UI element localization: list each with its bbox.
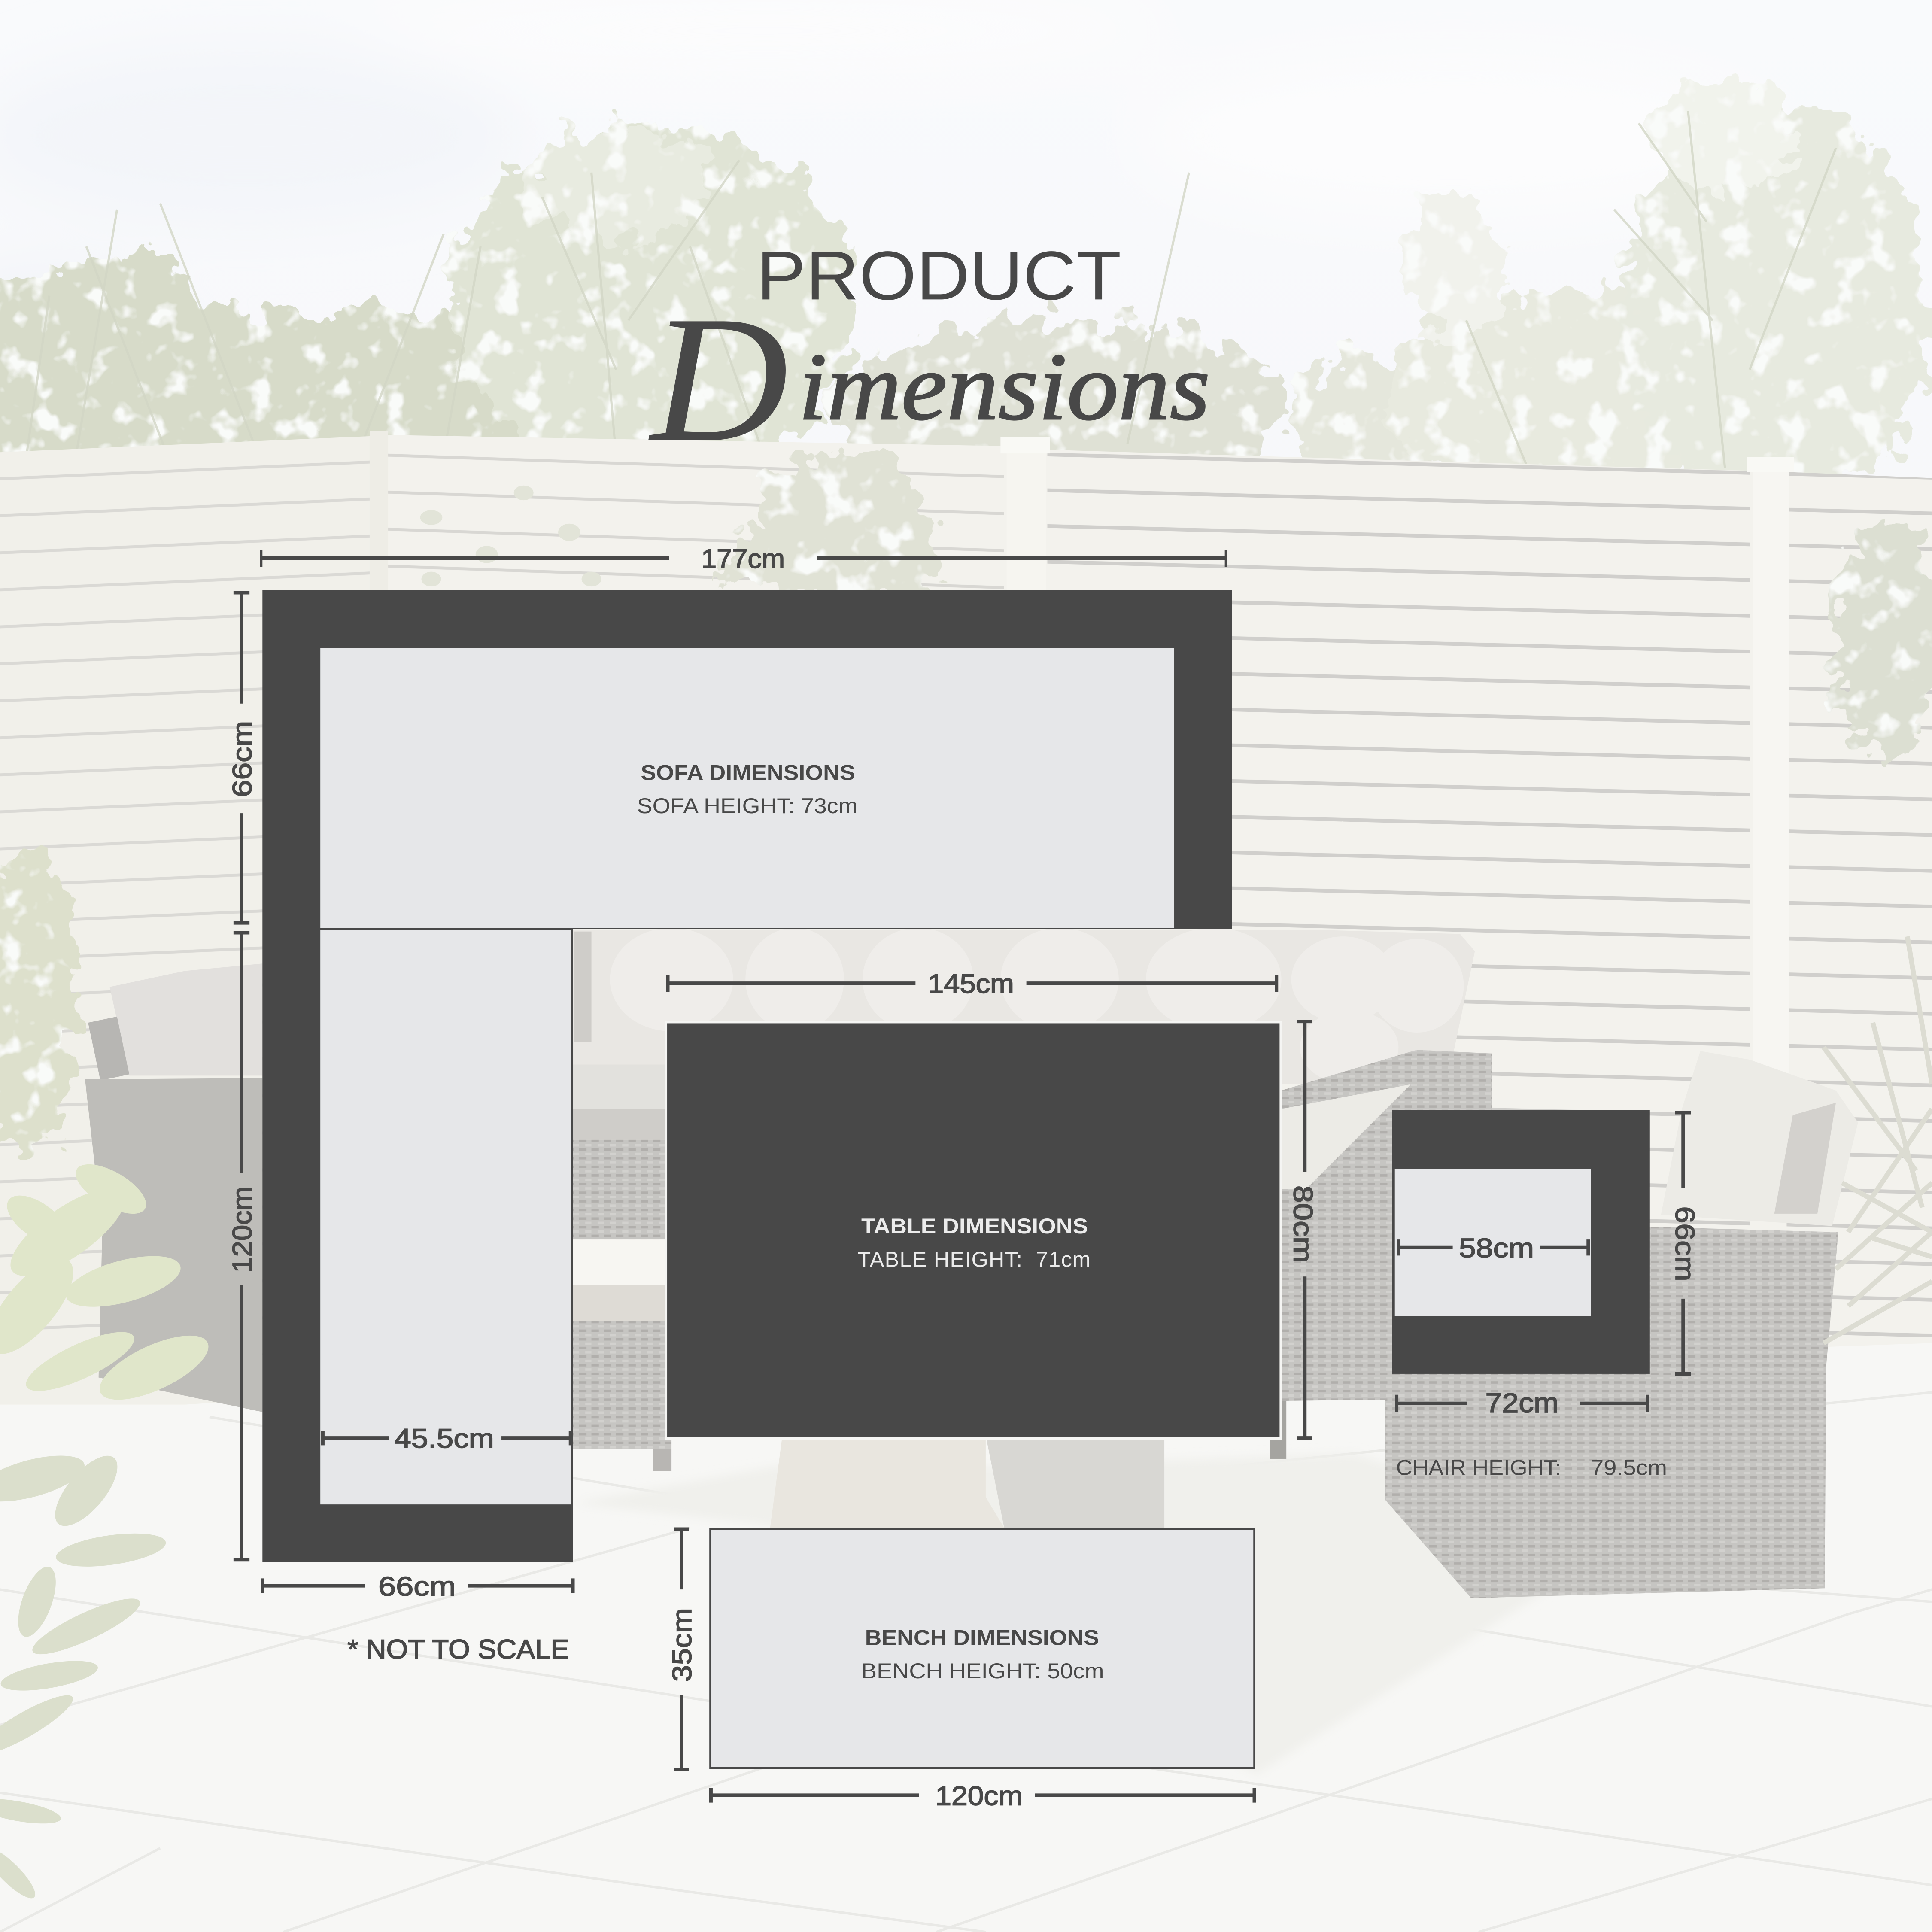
patio floor	[0, 1343, 1932, 1932]
right chair wicker	[1385, 1220, 1838, 1598]
dimension: 45.5cm seat	[323, 1424, 571, 1454]
chair height label	[1396, 1455, 1667, 1479]
chair height label: CHAIR HEIGHT:	[1396, 1455, 1561, 1479]
sofa outer footprint	[262, 590, 1232, 1562]
dimension: 58cm	[1398, 1233, 1588, 1264]
foreground plant left	[0, 850, 217, 1904]
dimension: sofa 120cm length	[227, 933, 257, 1560]
title: Dimensions script: imensions	[799, 334, 1210, 440]
dimension: sofa 66cm width: 66cm	[378, 1572, 456, 1602]
title: Dimensions script: D	[647, 279, 789, 480]
sky	[0, 0, 1932, 641]
title: Dimensions script	[647, 279, 1210, 480]
tree line foliage	[0, 80, 1928, 517]
bench label: BENCH DIMENSIONS	[865, 1625, 1099, 1649]
fence posts	[370, 431, 1794, 1106]
table diagram	[666, 969, 1318, 1439]
dimension: bench 120cm: 120cm	[935, 1781, 1023, 1811]
bench label: BENCH HEIGHT: 50cm	[861, 1659, 1104, 1683]
left chair	[85, 963, 262, 1412]
table top	[666, 1022, 1281, 1439]
floor shadows	[573, 1454, 1626, 1774]
dimension: 72cm: 72cm	[1485, 1388, 1558, 1418]
dimension: 35cm	[667, 1529, 697, 1769]
sofa long section seat	[320, 648, 1174, 928]
dimension: 45.5cm seat: 45.5cm	[394, 1424, 494, 1454]
table label: TABLE HEIGHT: 71cm	[857, 1247, 1091, 1271]
low table and bench behind	[573, 1065, 671, 1471]
sofa label: SOFA DIMENSIONS	[641, 761, 855, 785]
dimension: 177cm: 177cm	[701, 544, 785, 574]
bench label	[861, 1625, 1104, 1683]
patio tile lines	[0, 1392, 1932, 1932]
dimension: 35cm: 35cm	[667, 1608, 697, 1682]
table label	[857, 1214, 1091, 1271]
climbing plants in front of fence	[420, 444, 1932, 758]
fence: left panel	[0, 436, 370, 1417]
chair diagram	[1392, 1110, 1700, 1479]
table label: TABLE DIMENSIONS	[861, 1214, 1088, 1238]
dimension: 80cm	[1288, 1021, 1318, 1438]
left chair cushion	[109, 963, 262, 1075]
bench seat	[710, 1529, 1255, 1768]
bench diagram	[667, 1529, 1255, 1811]
left chair wicker	[85, 1078, 262, 1412]
dimension: bench 120cm	[711, 1781, 1255, 1811]
fence slats	[0, 453, 1932, 1337]
dimension: 80cm: 80cm	[1288, 1185, 1318, 1263]
sofa diagram	[227, 544, 1232, 1602]
dimension: 72cm	[1397, 1388, 1647, 1418]
dimension: 58cm: 58cm	[1459, 1233, 1534, 1264]
sofa right arm and table leg	[1270, 1050, 1492, 1459]
sofa back cushions	[573, 928, 1475, 1109]
foreground plant right	[1823, 936, 1932, 1343]
dimension: 177cm	[261, 544, 1226, 574]
dimension: sofa 120cm length: 120cm	[227, 1187, 257, 1273]
dimension: sofa 66cm depth: 66cm	[227, 721, 257, 797]
sofa label	[637, 761, 857, 818]
dimension: chair 66cm: 66cm	[1670, 1206, 1700, 1282]
note: not to scale: * NOT TO SCALE	[347, 1634, 569, 1665]
clouds	[0, 0, 1774, 444]
sofa label: SOFA HEIGHT: 73cm	[637, 794, 857, 818]
right chair	[1385, 1051, 1858, 1598]
dimension: sofa 66cm width	[262, 1572, 573, 1602]
fence: main panels	[388, 435, 1932, 1355]
title: Product: PRODUCT	[756, 237, 1121, 314]
right chair cushion	[1661, 1051, 1858, 1226]
chair outer footprint	[1392, 1110, 1650, 1374]
blanket under table	[770, 1435, 1164, 1528]
dimension: chair 66cm	[1670, 1113, 1700, 1374]
chair height label: 79.5cm	[1591, 1455, 1667, 1479]
dimension: 145cm: 145cm	[928, 969, 1014, 999]
chair seat	[1395, 1169, 1591, 1316]
dimension: 145cm	[668, 969, 1276, 999]
dimension: sofa 66cm depth	[227, 592, 257, 923]
sofa short section seat	[320, 930, 571, 1504]
